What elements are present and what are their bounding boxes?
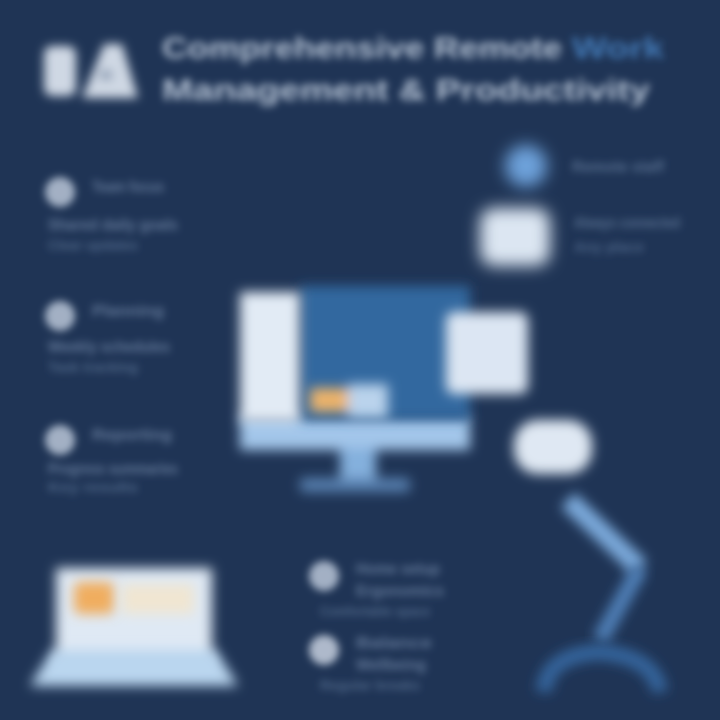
bottom list item 1 <box>309 561 444 619</box>
icon: person with label <box>480 145 680 266</box>
title: Management & Productivity <box>162 74 650 107</box>
icon: desk lamp <box>514 420 660 692</box>
person head <box>505 145 547 187</box>
laptop light chart <box>122 584 194 614</box>
bottom list item 2: Wellbeing <box>356 657 426 674</box>
title <box>162 32 664 107</box>
lamp base <box>544 652 660 692</box>
title: Work <box>572 32 664 65</box>
person caption <box>572 159 680 256</box>
person caption: Always connected <box>574 215 680 232</box>
floating window <box>446 312 528 394</box>
left list item 3: Key results <box>48 479 138 495</box>
monitor highlights <box>310 384 388 418</box>
bottom list item 1: Ergonomics <box>356 583 444 600</box>
left list item 1 <box>45 177 178 253</box>
icon: laptop <box>30 568 238 686</box>
header logo <box>44 44 138 98</box>
monitor screen <box>300 286 470 420</box>
left list item 2: Task tracking <box>48 359 138 375</box>
lamp head <box>514 420 592 474</box>
bottom list item 1: Comfortable space <box>320 603 430 619</box>
left list item 3 <box>45 425 178 495</box>
left list item 1: Team focus <box>92 179 164 196</box>
left list item 2: Weekly schedules <box>48 339 170 356</box>
lamp arm upper <box>568 500 640 568</box>
laptop screen <box>56 568 212 668</box>
title: Comprehensive Remote <box>162 32 562 65</box>
left list item 1: Shared daily goals <box>48 217 178 234</box>
laptop base <box>30 650 238 686</box>
left list item 3: Reporting <box>92 427 172 444</box>
icon: central desktop monitor <box>240 286 528 492</box>
bottom list item 1: Home setup <box>356 561 440 578</box>
bottom list item 2 <box>309 635 432 693</box>
laptop orange chart <box>74 582 114 614</box>
person caption: Remote staff <box>572 159 665 176</box>
left list item 2: Planning <box>92 303 164 320</box>
person body card <box>480 208 550 266</box>
monitor base <box>240 416 470 492</box>
lamp arm lower <box>600 568 640 640</box>
bottom list item 2: Balance <box>356 635 432 652</box>
person caption: Any place <box>574 239 644 256</box>
bottom list item 2: Regular breaks <box>320 677 420 693</box>
monitor left panel <box>240 292 300 422</box>
left list item 3: Progress summaries <box>48 461 178 478</box>
left list item 1: Clear updates <box>48 237 138 253</box>
left list item 2 <box>45 301 170 375</box>
